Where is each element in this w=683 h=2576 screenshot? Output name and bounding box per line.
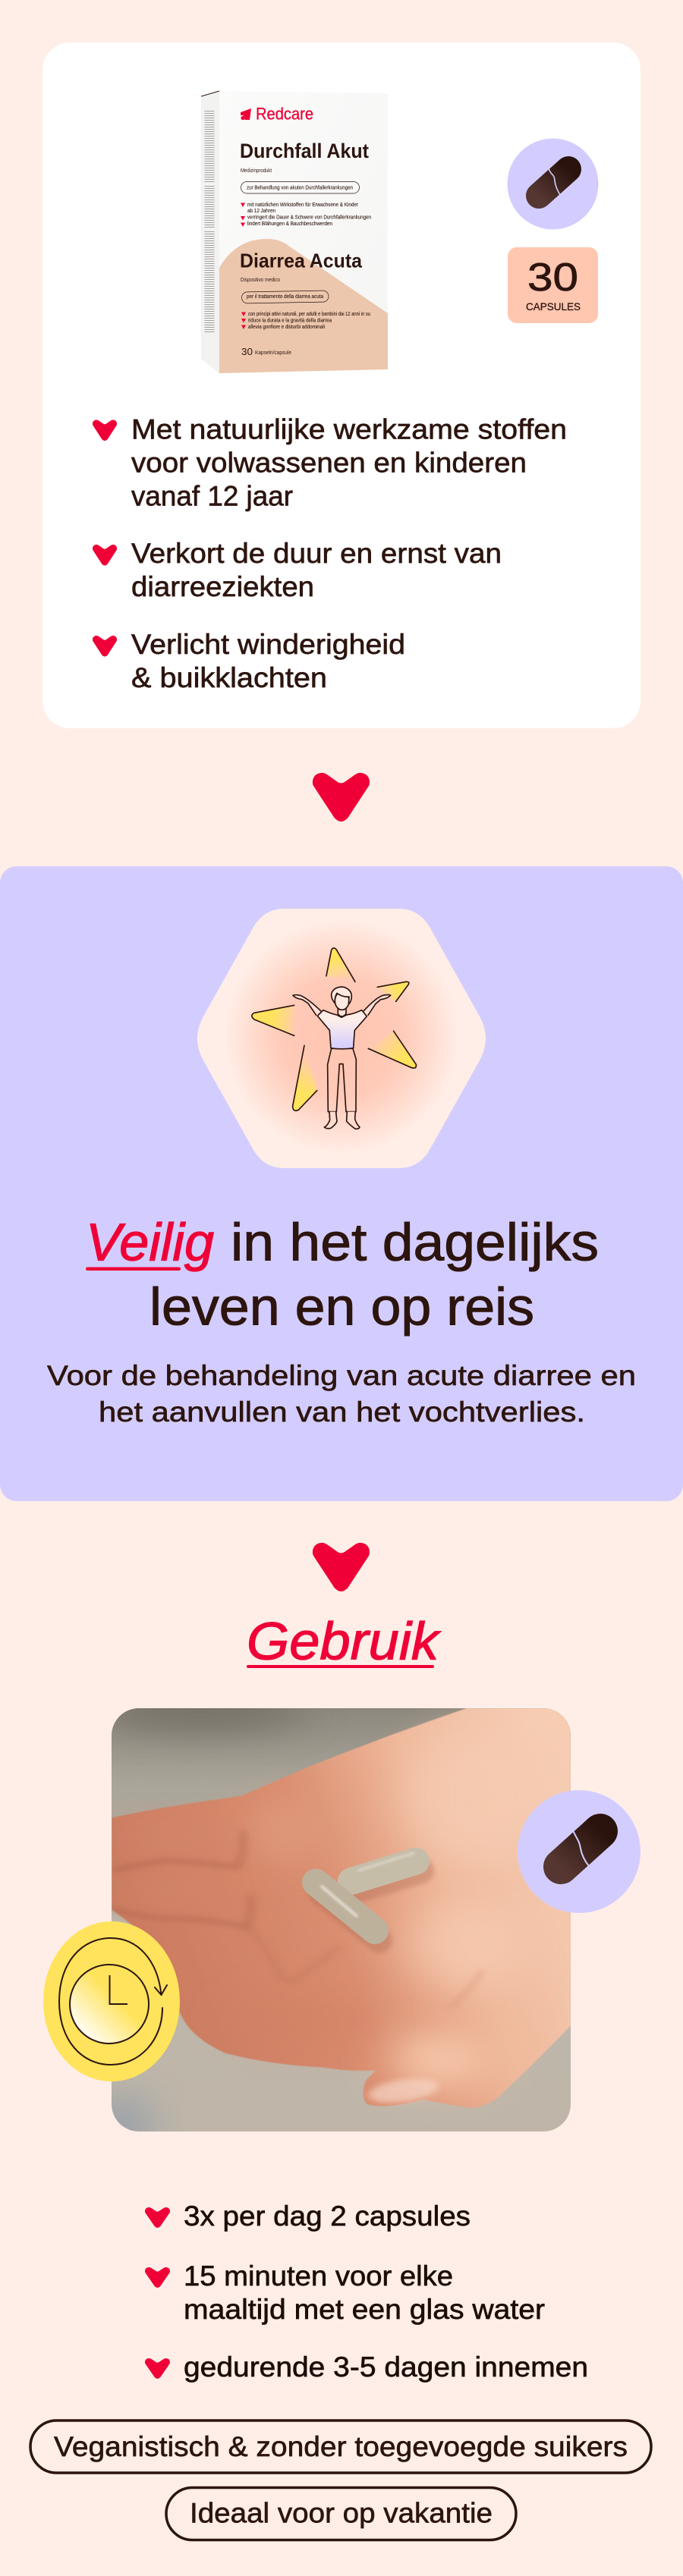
icon: heart bullet <box>145 2358 170 2379</box>
benefit 1: voor volwassenen en kinderen <box>131 448 527 478</box>
benefit 1: Met natuurlijke werkzame stoffen <box>131 414 567 445</box>
hand <box>112 1708 571 2108</box>
box text italian: con principi attivi naturali, per adulti e bambini dai 12 anni in su <box>248 310 370 317</box>
icon: heart bullet <box>145 2207 170 2228</box>
box text german: ab 12 Jahren <box>247 207 275 214</box>
heading: leven en op reis <box>150 1277 534 1337</box>
box text german: verringert die Dauer & Schwere von Durchfallerkrankungen <box>247 214 371 220</box>
box text german: Durchfall Akut <box>240 140 369 162</box>
benefit 2: diarreeziekten <box>131 571 314 602</box>
icon: heart bullet <box>93 545 117 566</box>
usage step 2 <box>145 2260 545 2325</box>
box text german <box>240 140 371 227</box>
box text italian: 30 <box>241 346 253 357</box>
description <box>47 1360 636 1428</box>
box text german: Medizinprodukt <box>241 167 272 174</box>
badge: 30 capsules: 30 <box>527 256 578 300</box>
capsules <box>316 1853 421 1940</box>
panel: product card <box>42 42 641 728</box>
tag: holiday <box>166 2488 516 2540</box>
usage step 3: gedurende 3-5 dagen innemen <box>184 2351 588 2383</box>
box text italian: riduce la durata e la gravità della diarrea <box>248 317 332 323</box>
box text italian: Diarrea Acuta <box>240 249 363 272</box>
usage step 2: maaltijd met een glas water <box>184 2294 545 2325</box>
icon: heart bullet <box>145 2267 170 2288</box>
heading: usage: Gebruik <box>247 1611 441 1670</box>
heading: in het dagelijks <box>231 1212 599 1271</box>
box text italian: per il trattamento della diarrea acuta <box>247 293 324 300</box>
icon: capsule <box>507 138 598 229</box>
icon: heart arrow 2 <box>313 1543 370 1591</box>
illustration: hexagon with figure <box>197 909 486 1168</box>
box text german: mit natürlichen Wirkstoffen für Erwachsene & Kinder <box>247 201 358 208</box>
icon: clock badge <box>43 1921 180 2081</box>
benefit 2 <box>93 538 502 602</box>
icon: heart bullet <box>93 419 117 441</box>
box text german: lindert Blähungen & Bauchbeschwerden <box>247 220 332 227</box>
tag: vegan: Veganistisch & zonder toegevoegde suikers <box>54 2431 628 2462</box>
heading <box>86 1212 599 1337</box>
figure <box>328 1048 356 1112</box>
box text italian: Kapseln/capsule <box>255 349 291 356</box>
brand logo: Redcare <box>256 105 313 123</box>
tag: vegan <box>30 2420 651 2473</box>
badge: 30 capsules <box>508 247 598 323</box>
benefit 1: vanaf 12 jaar <box>131 481 293 511</box>
heading: Veilig <box>86 1212 214 1271</box>
usage step 1: 3x per dag 2 capsules <box>184 2201 471 2232</box>
icon: heart arrow 1 <box>313 773 370 821</box>
benefit 3: Verlicht winderigheid <box>131 629 405 660</box>
photo: hand holding capsules <box>112 1708 571 2131</box>
icon: capsule badge <box>518 1790 641 1913</box>
box text italian: allevia gonfiore e disturbi addominali <box>248 323 325 330</box>
product box <box>201 91 388 373</box>
badge: 30 capsules: CAPSULES <box>526 300 581 313</box>
description: het aanvullen van het vochtverlies. <box>99 1396 585 1428</box>
panel: safe in daily life <box>0 866 683 1501</box>
tag: holiday: Ideaal voor op vakantie <box>190 2497 493 2529</box>
box text italian: Dispositivo medico <box>241 276 280 283</box>
benefit 3: & buikklachten <box>131 662 327 693</box>
benefit 3 <box>93 629 405 693</box>
description: Voor de behandeling van acute diarree en <box>47 1360 636 1391</box>
box text german: zur Behandlung von akuten Durchfallerkrankungen <box>247 184 353 191</box>
benefit 1 <box>93 414 567 511</box>
star rays <box>326 948 355 982</box>
benefit 2: Verkort de duur en ernst van <box>131 538 502 569</box>
usage step 2: 15 minuten voor elke <box>184 2260 453 2292</box>
icon: heart bullet <box>93 636 117 657</box>
box text italian <box>240 249 370 357</box>
